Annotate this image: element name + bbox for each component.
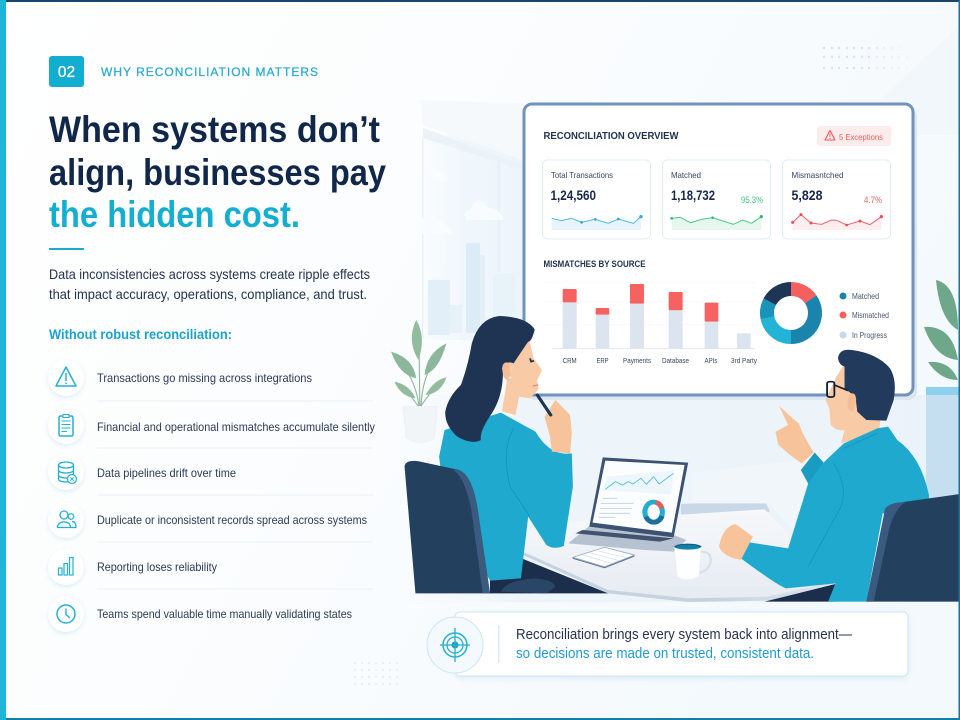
laptop [568, 457, 688, 552]
coffee mug [674, 544, 711, 580]
item: manual validation time: Teams spend valuable time manually validating states [97, 607, 352, 621]
woman [439, 316, 608, 593]
exceptions pill [817, 126, 891, 146]
KPI card: matched: 95.3% [741, 195, 763, 205]
bar chart: CRM [563, 356, 577, 365]
donut chart [767, 289, 815, 337]
KPI card: matched: 1,18,732 [671, 188, 715, 203]
right plant and blue planter [924, 280, 960, 558]
dashboard monitor [524, 104, 917, 400]
KPI card: total transactions [542, 160, 650, 239]
man [719, 350, 929, 602]
notepad [573, 547, 634, 568]
icon: target [427, 617, 483, 673]
callout text: so decisions are made on trusted, consistent data. [516, 645, 814, 662]
KPI card: total transactions: Total Transactions [551, 170, 613, 180]
bar chart: 3rd Party [731, 356, 757, 365]
bar chart: APIs [704, 356, 718, 365]
donut legend: Matched [852, 292, 879, 301]
section label: WHY RECONCILIATION MATTERS [101, 65, 318, 79]
item: pipelines drift: Data pipelines drift over time [97, 466, 236, 480]
item: duplicate records: Duplicate or inconsistent records spread across systems [97, 513, 367, 527]
KPI card: mismatched [782, 160, 890, 239]
callout text: Reconciliation brings every system back into alignment— [516, 626, 852, 643]
band behind desk [681, 500, 770, 518]
callout text [516, 626, 852, 662]
KPI card: mismatched: 5,828 [792, 188, 823, 203]
title [49, 109, 386, 235]
office wall [395, 395, 960, 602]
man's chair [866, 494, 960, 602]
list of consequences [48, 360, 375, 632]
donut legend [840, 292, 889, 340]
donut legend: In Progress [852, 331, 887, 340]
desk [515, 509, 835, 602]
item: transactions go missing: Transactions go missing across integrations [97, 371, 312, 385]
bar chart: Payments [623, 356, 651, 365]
intro paragraph: Data inconsistencies across systems create ripple effects [49, 266, 370, 282]
item: manual validation time [48, 596, 352, 632]
intro paragraph: that impact accuracy, operations, compliance, and trust. [49, 286, 367, 302]
decorative dots top right [823, 47, 908, 69]
item: pipelines drift [48, 454, 236, 490]
item: reporting loses reliability [48, 549, 217, 585]
donut legend: Mismatched [852, 311, 889, 320]
KPI card: matched [662, 160, 770, 239]
title: When systems don’t [49, 109, 380, 150]
section badge: 02 [58, 64, 75, 81]
woman's chair [405, 461, 555, 593]
left plant [391, 320, 446, 442]
illustration: team at desk [391, 316, 960, 602]
section badge [49, 56, 84, 87]
callout [427, 612, 908, 676]
item: reporting loses reliability: Reporting loses reliability [97, 560, 217, 574]
bar chart [545, 283, 757, 365]
KPI card: mismatched: Mismasntched [792, 170, 844, 180]
title: the hidden cost. [49, 194, 300, 235]
item: mismatches accumulate: Financial and operational mismatches accumulate silently [97, 420, 375, 434]
KPI card: matched: Matched [671, 170, 701, 180]
intro paragraph [49, 266, 370, 302]
decorative dots bottom centre [354, 662, 398, 685]
KPI card: mismatched: 4.7% [864, 195, 882, 205]
exceptions pill: 5 Exceptions [839, 132, 883, 142]
item: transactions go missing [48, 360, 312, 396]
subheading: Without robust reconciliation: [49, 326, 232, 342]
bar chart: Database [662, 356, 689, 365]
KPI card: total transactions: 1,24,560 [550, 188, 596, 203]
title: align, businesses pay [49, 152, 386, 193]
item: mismatches accumulate [48, 408, 375, 444]
dashboard title: RECONCILIATION OVERVIEW [544, 131, 679, 142]
chart heading: MISMATCHES BY SOURCE [544, 259, 646, 270]
item: duplicate records [48, 502, 367, 538]
bar chart: ERP [596, 356, 608, 365]
office window background [420, 100, 523, 340]
